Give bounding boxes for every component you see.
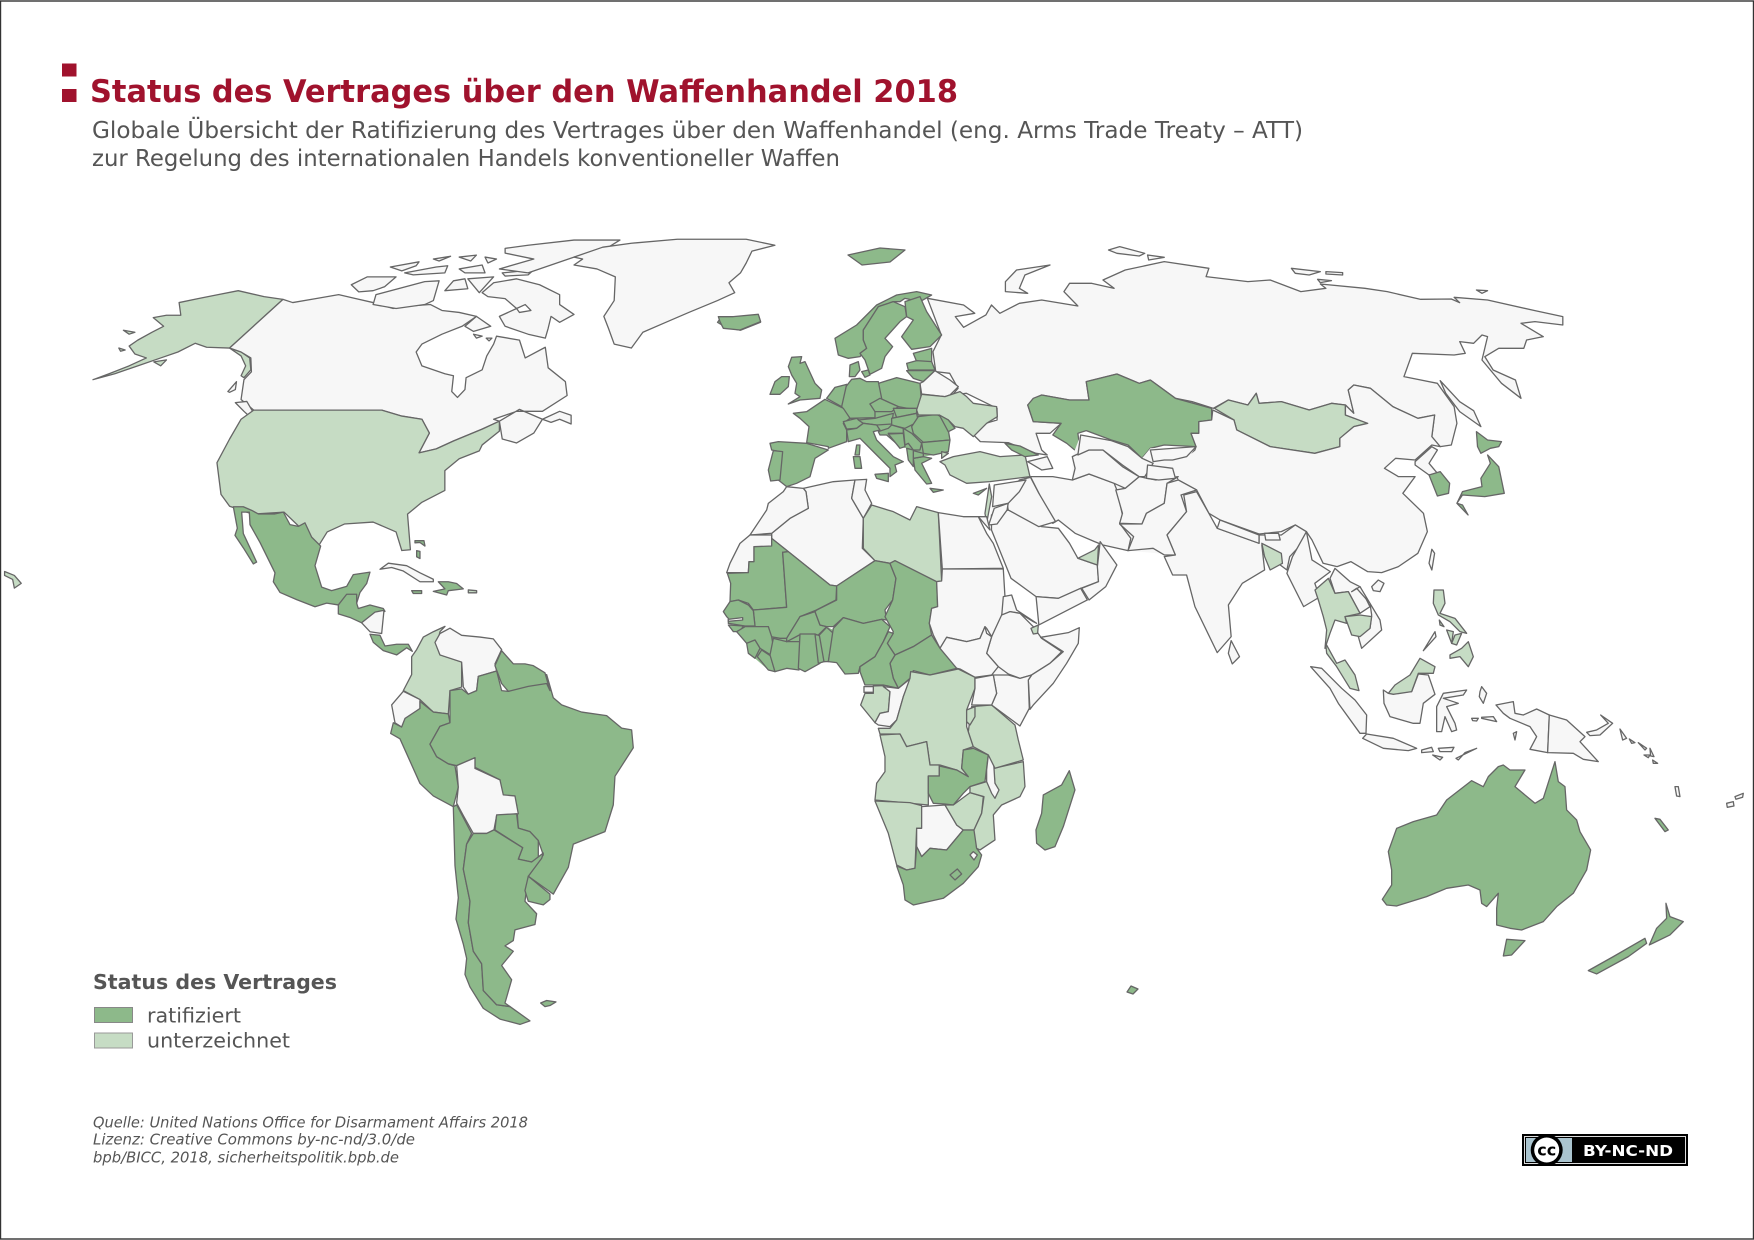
icon: CC BY-NC-ND licence badge (1522, 1134, 1688, 1166)
icon: Kerguelen island (1127, 986, 1138, 994)
subtitle: zur Regelung des internationalen Handels konventioneller Waffen (92, 144, 840, 172)
region: Latin America (233, 507, 633, 1024)
subtitle (92, 116, 1303, 172)
source text: Lizenz: Creative Commons by-nc-nd/3.0/de (93, 1130, 415, 1148)
subtitle: Globale Übersicht der Ratifizierung des Vertrages über den Waffenhandel (eng. Arms Trade Treaty – ATT) (92, 116, 1303, 144)
legend item: ratifiziert (94, 1004, 241, 1028)
region: Africa (723, 479, 1079, 905)
legend heading: Status des Vertrages (93, 970, 337, 994)
legend (93, 970, 337, 1052)
title marker icon (62, 64, 76, 102)
region: North America and Greenland (5, 239, 775, 588)
source text: Quelle: United Nations Office for Disarmament Affairs 2018 (93, 1114, 528, 1132)
region: Svalbard (848, 248, 905, 265)
source text (93, 1114, 528, 1166)
icon: CC BY-NC-ND licence badge: BY-NC-ND (1583, 1142, 1673, 1160)
icon: CC BY-NC-ND licence badge: cc (1537, 1140, 1556, 1160)
region: Southeast Asia and Oceania (1311, 568, 1743, 974)
region: Asia (927, 247, 1563, 664)
legend item: unterzeichnet: unterzeichnet (147, 1028, 290, 1052)
legend item: ratifiziert: ratifiziert (147, 1004, 241, 1028)
title: Status des Vertrages über den Waffenhandel 2018 (90, 74, 958, 110)
source text: bpb/BICC, 2018, sicherheitspolitik.bpb.de (93, 1148, 399, 1166)
region: Europe (718, 292, 1038, 523)
